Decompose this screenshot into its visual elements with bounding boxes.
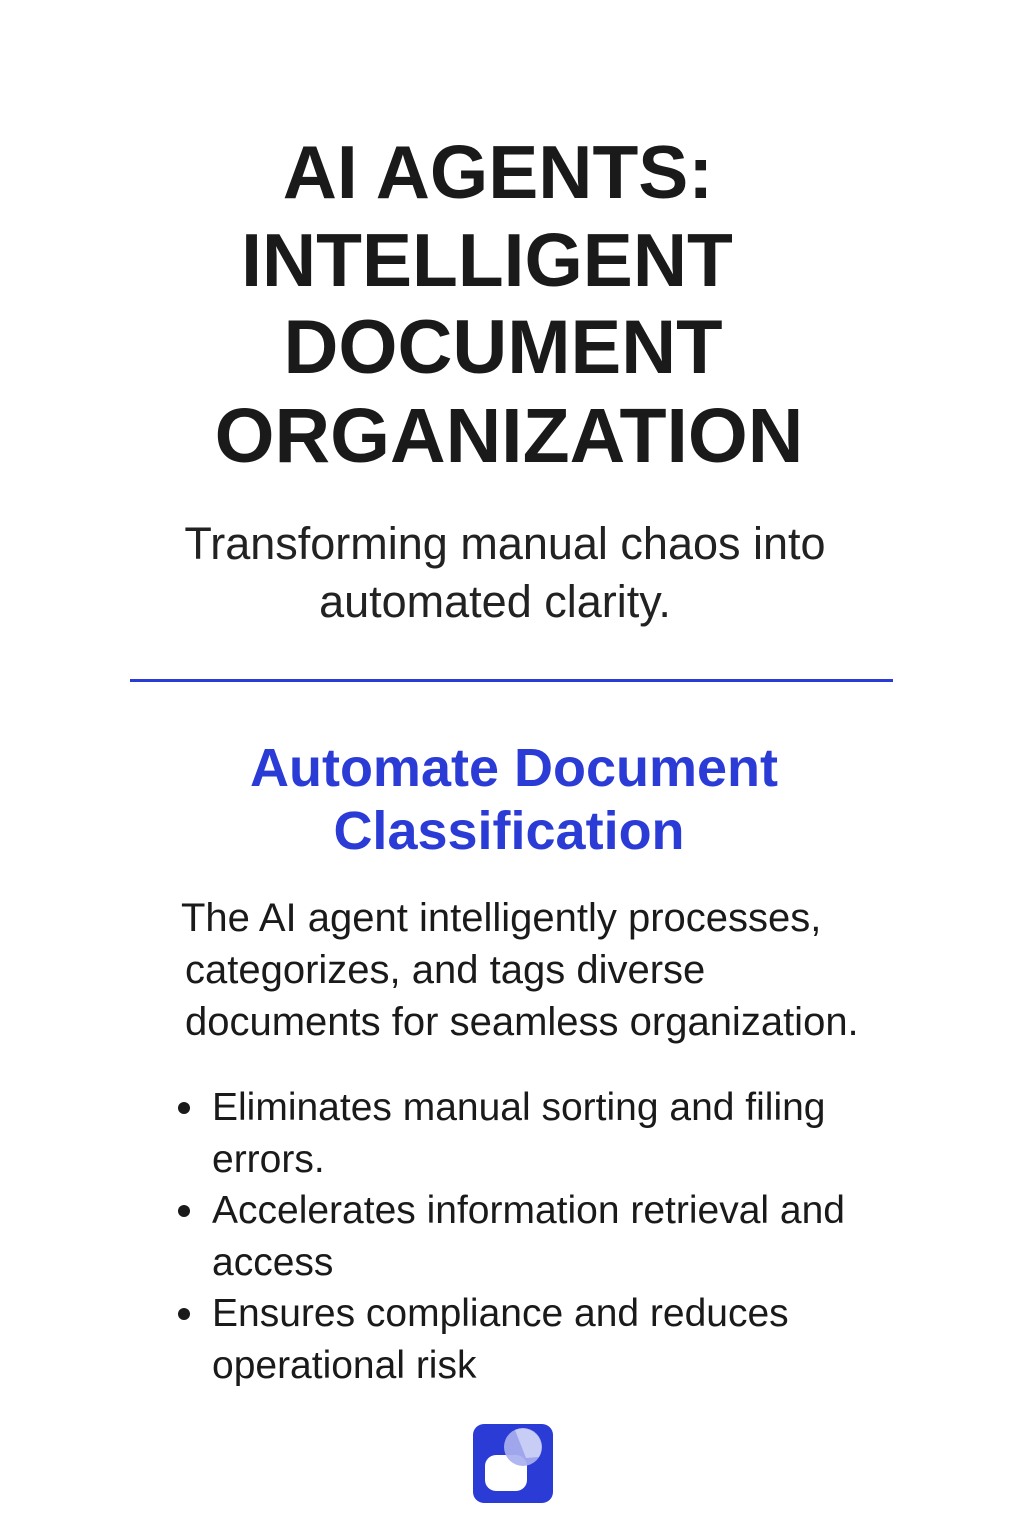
- subtitle: [184, 518, 826, 627]
- bullet list: [178, 1086, 845, 1386]
- bullet 1: Eliminates manual sorting and filing: [212, 1086, 826, 1129]
- subtitle: Transforming manual chaos into: [184, 518, 826, 569]
- bullet 3: [178, 1292, 789, 1386]
- title: INTELLIGENT: [241, 218, 733, 302]
- bullet 2: Accelerates information retrieval and: [212, 1189, 845, 1232]
- bullet 3: operational risk: [212, 1344, 476, 1386]
- description paragraph: categorizes, and tags diverse: [185, 948, 705, 992]
- title: DOCUMENT: [283, 305, 723, 390]
- section heading: Automate Document: [250, 738, 778, 798]
- bullet 2: [178, 1189, 845, 1284]
- icon: app logo: [473, 1424, 553, 1503]
- description paragraph: [181, 896, 859, 1044]
- bullet 3: Ensures compliance and reduces: [212, 1292, 789, 1335]
- description paragraph: documents for seamless organization.: [185, 1000, 859, 1044]
- bullet 1: [178, 1086, 826, 1180]
- divider: [130, 679, 893, 682]
- description paragraph: The AI agent intelligently processes,: [181, 896, 821, 940]
- title: AI AGENTS:: [283, 130, 713, 214]
- bullet 1: errors.: [212, 1138, 325, 1180]
- title: [215, 130, 803, 479]
- section heading: Classification: [333, 801, 685, 861]
- title: ORGANIZATION: [215, 393, 803, 479]
- subtitle: automated clarity.: [319, 576, 671, 627]
- bullet 2: access: [212, 1240, 333, 1284]
- section heading: [250, 738, 778, 861]
